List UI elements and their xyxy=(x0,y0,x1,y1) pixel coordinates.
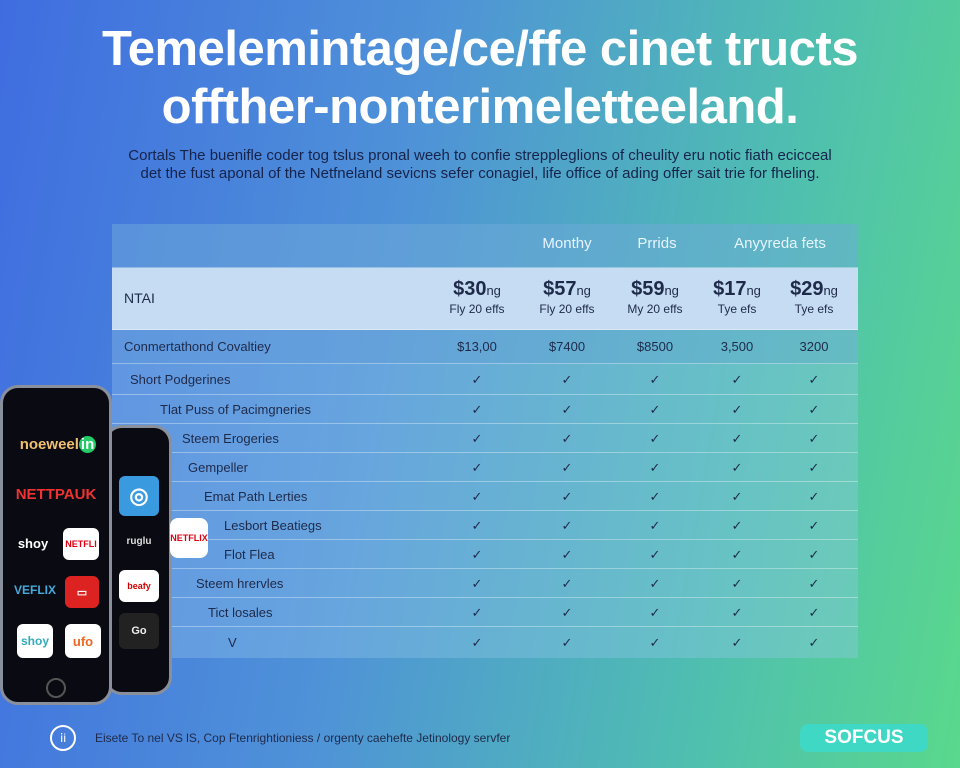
title: offther-nonterimeletteeland. xyxy=(162,80,798,134)
comparison table: ✓ xyxy=(650,489,660,504)
icon: front phone: ufo xyxy=(73,634,93,648)
title: Temelemintage/ce/ffe cinet tructs xyxy=(102,22,858,76)
feature rows: ✓ xyxy=(472,372,482,387)
comparison table: ✓ xyxy=(732,489,742,504)
subtitle text: det the fust aponal of the Netfneland sevicns sefer conagiel, life office of ading offer sait trie for fheling. xyxy=(140,165,820,182)
icon: front phone xyxy=(0,385,112,705)
row: connectivity: $8500 xyxy=(637,339,673,354)
comparison table: ✓ xyxy=(809,402,819,417)
icon: back phone: Go xyxy=(131,625,147,637)
icon: back phone: beafy xyxy=(127,581,151,591)
feature rows: ✓ xyxy=(809,372,819,387)
comparison table: ✓ xyxy=(650,518,660,533)
comparison table: ✓ xyxy=(472,402,482,417)
comparison table: Gempeller xyxy=(188,460,248,475)
comparison table: V xyxy=(228,635,237,650)
comparison table: ✓ xyxy=(562,576,572,591)
comparison table: ✓ xyxy=(732,460,742,475)
price row: $29ng xyxy=(790,278,838,300)
comparison table: ✓ xyxy=(472,489,482,504)
comparison table: ✓ xyxy=(809,605,819,620)
subtitle text xyxy=(128,147,832,182)
row: connectivity xyxy=(112,330,858,364)
feature rows: ✓ xyxy=(562,372,572,387)
comparison table: ✓ xyxy=(562,489,572,504)
comparison table: Tlat Puss of Pacimgneries xyxy=(160,402,311,417)
comparison table: ✓ xyxy=(650,402,660,417)
comparison table: ✓ xyxy=(732,635,742,650)
comparison table: ✓ xyxy=(732,518,742,533)
comparison table: ✓ xyxy=(472,576,482,591)
comparison table: ✓ xyxy=(650,605,660,620)
comparison table: ✓ xyxy=(809,635,819,650)
comparison table: Flot Flea xyxy=(224,547,275,562)
icon: back phone: ◎ xyxy=(129,483,149,508)
icon: back phone xyxy=(104,425,172,695)
comparison table: ✓ xyxy=(562,518,572,533)
comparison table: Steem hrervles xyxy=(196,576,283,591)
price row: Tye efs xyxy=(795,302,833,316)
price row: $17ng xyxy=(713,278,761,300)
footer icon: ⅰi xyxy=(60,731,66,745)
row: connectivity: Conmertathond Covaltiey xyxy=(124,339,271,354)
price row: $30ng xyxy=(453,278,501,300)
comparison table: Steem Erogeries xyxy=(182,431,279,446)
comparison table: ✓ xyxy=(732,547,742,562)
comparison table: ✓ xyxy=(562,635,572,650)
comparison table: ✓ xyxy=(650,431,660,446)
comparison table: ✓ xyxy=(732,402,742,417)
comparison table: ✓ xyxy=(809,518,819,533)
comparison table: ✓ xyxy=(732,431,742,446)
row: connectivity: $13,00 xyxy=(457,339,497,354)
comparison table: ✓ xyxy=(650,460,660,475)
comparison table: ✓ xyxy=(809,547,819,562)
footer icon xyxy=(50,725,76,751)
comparison table: ✓ xyxy=(732,605,742,620)
icon: front phone: noeweel xyxy=(20,436,79,452)
comparison table: ✓ xyxy=(809,431,819,446)
table header row: Monthy xyxy=(542,235,592,252)
comparison table: Tict losales xyxy=(208,605,273,620)
price row: NTAI xyxy=(124,290,155,306)
comparison table: ✓ xyxy=(809,460,819,475)
footer text: Eisete To nel VS lS, Cop Ftenrightioniess / orgenty caehefte Jetinology servfer xyxy=(95,731,510,745)
comparison table: ✓ xyxy=(472,635,482,650)
row: connectivity: 3,500 xyxy=(721,339,753,354)
subtitle text: Cortals The buenifle coder tog tslus pronal weeh to confie streppleglions of cheulity eru notic fiath ecicceal xyxy=(128,147,832,164)
comparison table: ✓ xyxy=(562,605,572,620)
table header row: Anyyreda fets xyxy=(734,235,826,252)
comparison table: ✓ xyxy=(809,576,819,591)
comparison table: ✓ xyxy=(562,431,572,446)
comparison table: ✓ xyxy=(472,605,482,620)
icon: netflix badge xyxy=(170,518,208,558)
icon: front phone: in xyxy=(81,436,94,452)
comparison table: ✓ xyxy=(562,460,572,475)
icon: front phone: shoy xyxy=(18,536,48,550)
comparison table: ✓ xyxy=(562,402,572,417)
comparison table: ✓ xyxy=(650,576,660,591)
icon: front phone: shoy xyxy=(21,634,49,648)
icon: front phone: NETTPAUK xyxy=(16,486,96,502)
comparison table xyxy=(112,224,858,658)
comparison table: Emat Path Lerties xyxy=(204,489,307,504)
comparison table: ✓ xyxy=(650,547,660,562)
icon: front phone: ▭ xyxy=(77,586,87,598)
comparison table: ✓ xyxy=(472,547,482,562)
comparison table: Lesbort Beatiegs xyxy=(224,518,322,533)
table header row: Prrids xyxy=(637,235,677,252)
button: SOFCUS: SOFCUS xyxy=(824,727,904,748)
comparison table: ✓ xyxy=(472,518,482,533)
feature rows: ✓ xyxy=(650,372,660,387)
table header row xyxy=(112,224,858,268)
feature rows: Short Podgerines xyxy=(130,372,230,387)
comparison table: ✓ xyxy=(650,635,660,650)
icon: netflix badge: NETFLIX xyxy=(170,533,208,543)
row: connectivity: 3200 xyxy=(800,339,828,354)
row: connectivity: $7400 xyxy=(549,339,585,354)
feature rows: ✓ xyxy=(732,372,742,387)
feature rows xyxy=(112,364,858,395)
comparison table: ✓ xyxy=(732,576,742,591)
icon: front phone: NETFLI xyxy=(65,539,97,549)
price row: Fly 20 effs xyxy=(539,302,595,316)
icon: front phone: VEFLIX xyxy=(14,583,56,597)
price row xyxy=(112,268,858,330)
comparison table: ✓ xyxy=(472,431,482,446)
price row: $57ng xyxy=(543,278,591,300)
comparison table: ✓ xyxy=(472,460,482,475)
comparison table: ✓ xyxy=(562,547,572,562)
button: SOFCUS xyxy=(800,724,928,752)
comparison table: ✓ xyxy=(809,489,819,504)
price row: Fly 20 effs xyxy=(449,302,505,316)
price row: My 20 effs xyxy=(627,302,683,316)
title xyxy=(102,22,858,134)
icon: back phone: ruglu xyxy=(126,536,152,546)
price row: Tye efs xyxy=(718,302,756,316)
price row: $59ng xyxy=(631,278,679,300)
